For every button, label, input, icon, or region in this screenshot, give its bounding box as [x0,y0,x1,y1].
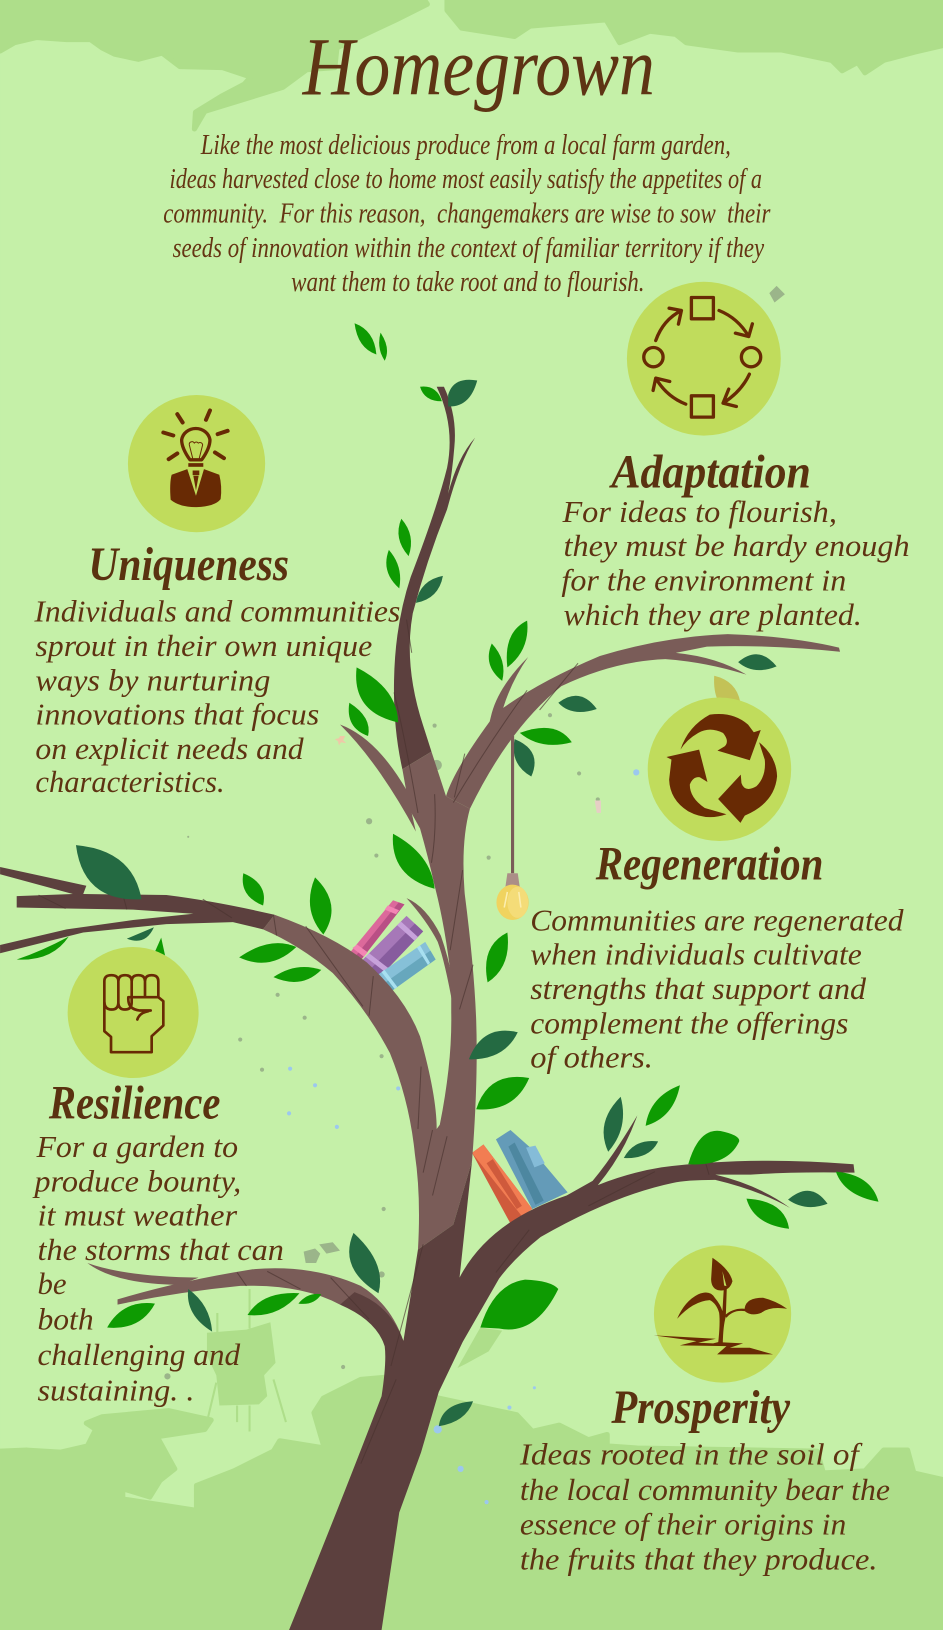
icon: adaptation cycle [627,282,781,436]
text: adaptation: which they are planted. [563,598,862,632]
background: bottom ground [0,1377,943,1630]
text: prosperity: Ideas rooted in the soil of [519,1438,863,1472]
intro text: want them to take root and to flourish. [291,267,645,298]
heading: prosperity: Prosperity [610,1381,791,1434]
book: orange [472,1145,532,1224]
text: adaptation: they must be hardy enough [563,529,910,563]
text: regeneration: of others. [530,1041,653,1075]
text: resilience: challenging and [37,1338,241,1372]
section: resilience [32,1077,284,1407]
book: teal [496,1130,568,1209]
text: adaptation: For ideas to flourish, [561,495,837,529]
icon: regeneration recycle [648,698,791,841]
icon: prosperity sprout [654,1245,791,1383]
text: regeneration: complement the offerings [530,1006,848,1040]
text: prosperity: the fruits that they produce. [520,1543,877,1577]
tree [0,387,855,1630]
tree: upper trunk dark [394,387,475,769]
text: uniqueness [33,595,400,799]
text: adaptation [561,495,910,632]
text: prosperity [519,1438,890,1577]
text: uniqueness: sprout in their own unique [35,629,372,663]
background: top left foliage [0,0,427,129]
text: uniqueness: ways by nurturing [35,663,270,697]
text: adaptation: for the environment in [561,563,846,597]
icon: uniqueness bulb head [128,395,265,532]
tree: book twig [407,898,453,1008]
tree: lower trunk and right branch [289,1115,855,1630]
intro text: Like the most delicious produce from a local farm garden, [200,130,731,161]
text: resilience: For a garden to [35,1130,238,1164]
tree: upper right branch [446,634,840,809]
grey leaf [769,286,785,303]
text: resilience: produce bounty, [32,1164,241,1198]
text: resilience: the storms that can [37,1233,284,1267]
text: resilience: be [37,1267,67,1301]
section: uniqueness [33,538,400,799]
tree: lower left branch [118,1268,403,1341]
title: Homegrown [302,21,655,113]
icon: resilience fist [68,947,199,1078]
tree: bark grain [39,620,709,1464]
text: resilience: sustaining. . [37,1373,194,1407]
intro text: seeds of innovation within the context of familiar territory if they [173,233,765,264]
background: leaf shadow [457,1327,502,1368]
text: uniqueness: Individuals and communities [33,595,400,629]
tree: left limb dark prongs [0,867,275,953]
text: regeneration: strengths that support and [530,972,867,1006]
tree: middle trunk and left limb [263,752,477,1250]
heading: adaptation: Adaptation [609,446,811,499]
section: adaptation [561,446,910,632]
text: uniqueness: innovations that focus [35,698,319,732]
tree: lower left twig [87,1263,199,1285]
intro text: ideas harvested close to home most easily satisfy the appetites of a [170,164,762,195]
tree: upper left twig [340,725,416,832]
book: blue [374,942,436,994]
hanging light bulb [496,736,529,920]
leaves [17,323,878,1426]
text: uniqueness: on explicit needs and [35,732,305,766]
intro text: community. For this reason, changemakers are wise to sow their [163,198,770,229]
book: purple [360,916,423,977]
text: regeneration: Communities are regenerated [530,903,904,937]
book: pink [349,900,404,962]
section: regeneration [530,837,904,1075]
text: prosperity: essence of their origins in [520,1507,846,1541]
text: uniqueness: characteristics. [35,765,225,799]
heading: regeneration: Regeneration [595,837,823,890]
text: resilience: both [37,1303,94,1337]
background: lander silhouette [207,1289,286,1431]
heading: resilience: Resilience [48,1077,220,1130]
section: prosperity [519,1381,890,1577]
heading: uniqueness: Uniqueness [88,538,289,591]
text: resilience [32,1130,284,1407]
text: regeneration: when individuals cultivate [530,938,862,972]
books [349,900,568,1224]
paint spatter [164,286,785,1504]
text: regeneration [530,903,904,1075]
text: prosperity: the local community bear the [520,1473,890,1507]
background: top right foliage [447,0,943,73]
text: resilience: it must weather [37,1199,237,1233]
intro text [163,130,770,298]
